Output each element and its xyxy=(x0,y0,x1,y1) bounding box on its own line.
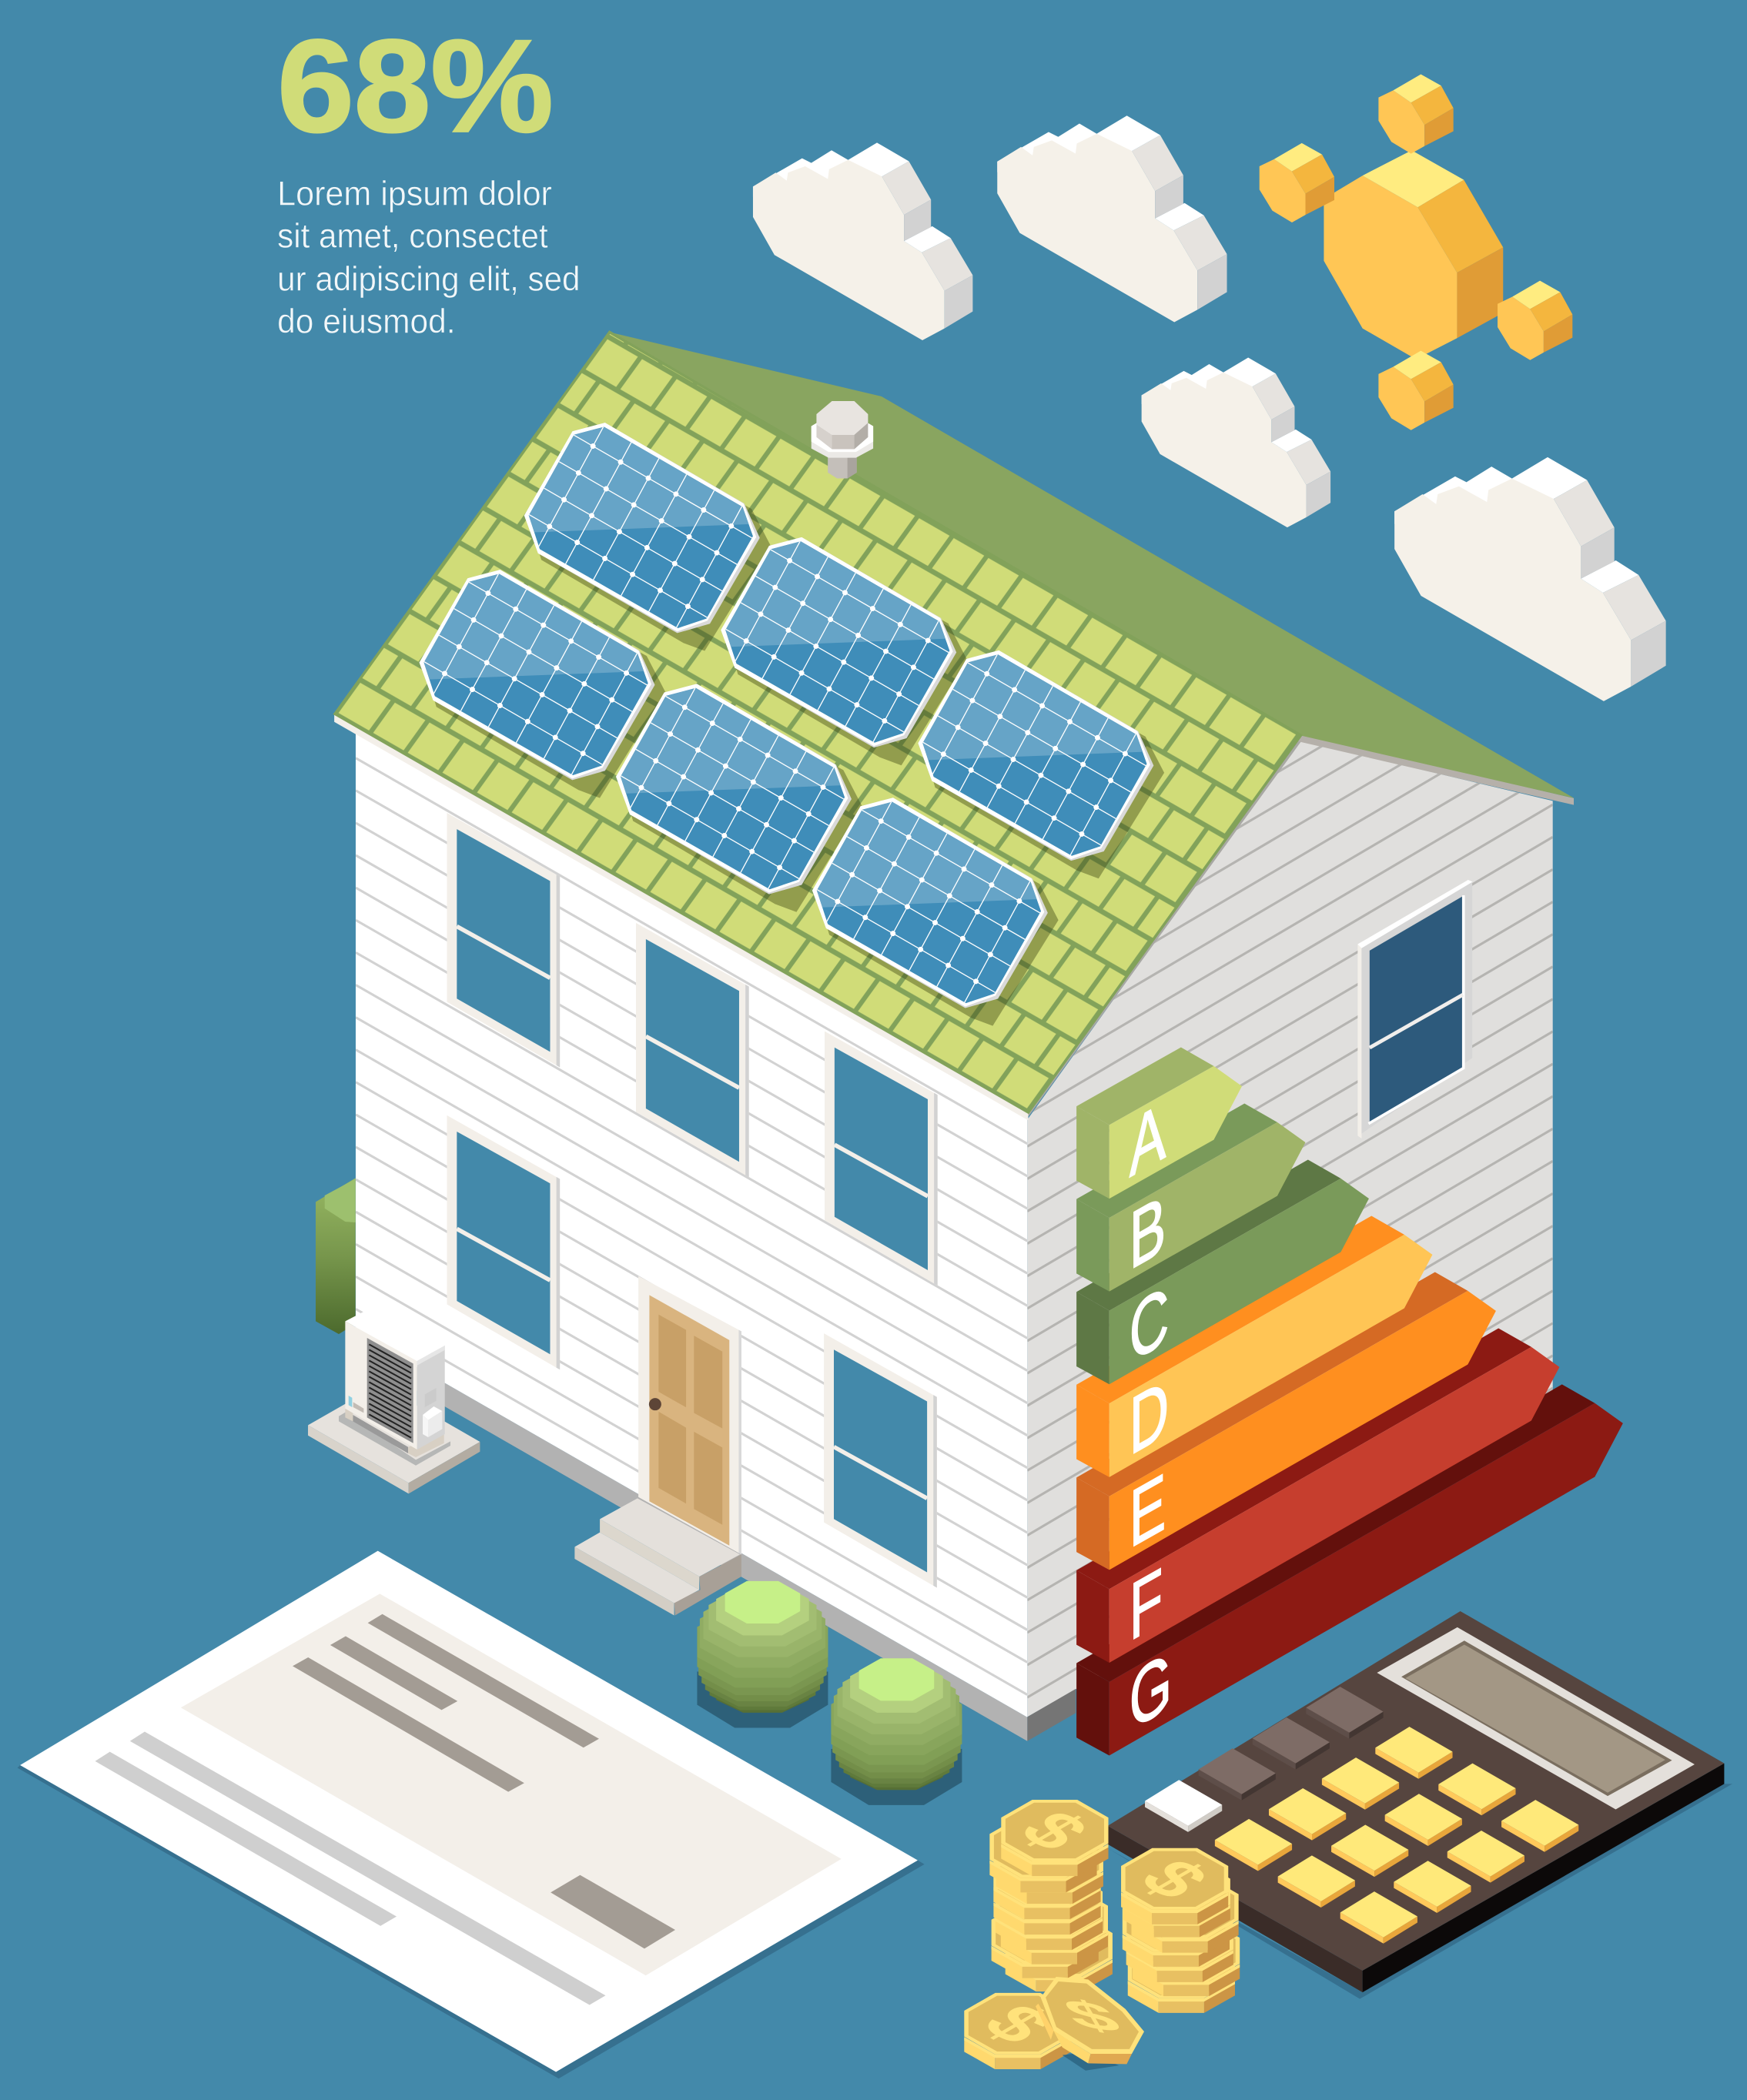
description text block: do eiusmod. xyxy=(277,303,456,341)
bar E: E xyxy=(1130,1455,1166,1566)
description text block: sit amet, consectet xyxy=(277,218,548,256)
coin stack left xyxy=(989,1800,1113,1991)
back roof plane and gable underside xyxy=(610,332,1575,805)
front wall with siding xyxy=(356,733,1027,1741)
bar C xyxy=(1076,1159,1369,1384)
coin stack left: $ xyxy=(1002,1801,1106,1861)
description text block: ur adipiscing elit, sed xyxy=(277,261,580,299)
solar panel 3 xyxy=(712,523,967,765)
loose coin flat: $ xyxy=(966,1994,1069,2054)
statistic heading: 68%: 68% xyxy=(277,14,554,159)
bar B: B xyxy=(1130,1176,1166,1287)
shrub 2 xyxy=(831,1658,962,1805)
back shrub behind house xyxy=(316,1178,356,1334)
front door xyxy=(638,1276,741,1554)
shrub 1 xyxy=(697,1581,828,1727)
window: upper right xyxy=(825,1032,938,1286)
bar G xyxy=(1076,1384,1623,1756)
window: lower right xyxy=(824,1333,937,1588)
calculator display xyxy=(1377,1627,1695,1809)
bar F: F xyxy=(1130,1550,1163,1658)
solar panel 4 xyxy=(607,670,862,912)
bar D: D xyxy=(1130,1360,1169,1473)
window: upper middle xyxy=(636,923,749,1177)
bar F xyxy=(1076,1328,1559,1663)
icon: cloud 1 xyxy=(753,142,972,340)
calculator number keys xyxy=(1215,1727,1578,1944)
roof vent xyxy=(812,401,873,478)
loose coin leaning xyxy=(1036,1977,1144,2071)
utility bill document xyxy=(18,1551,925,2078)
side window xyxy=(1357,880,1473,1139)
house xyxy=(308,332,1575,1741)
icon: sun xyxy=(1260,74,1572,430)
solar panel 1 xyxy=(516,409,771,651)
description text block: Lorem ipsum dolor xyxy=(277,176,552,213)
bar A xyxy=(1076,1048,1242,1199)
bar G: G xyxy=(1130,1634,1172,1747)
coin stack right xyxy=(1121,1848,1240,2013)
solar panel 5 xyxy=(909,636,1164,878)
loose coin leaning: $ xyxy=(1055,1990,1130,2042)
bar D xyxy=(1076,1216,1432,1477)
door steps xyxy=(574,1498,741,1616)
calculator function keys xyxy=(1145,1687,1384,1832)
description text block xyxy=(277,176,580,341)
solar panel 2 xyxy=(411,556,665,798)
window: upper left xyxy=(447,813,560,1067)
front roof with shingles xyxy=(334,332,1301,1120)
coin stack right: $ xyxy=(1123,1849,1227,1909)
icon: cloud 3 xyxy=(1142,357,1330,527)
icon: cloud 2 xyxy=(997,115,1227,322)
energy rating chart A to G xyxy=(1076,1048,1623,1756)
window: lower left xyxy=(447,1115,560,1369)
sky: clouds and sun xyxy=(753,74,1666,701)
bar E xyxy=(1076,1272,1496,1570)
side wall xyxy=(1027,741,1553,1741)
solar panel 6 xyxy=(804,784,1059,1026)
calculator xyxy=(1108,1611,1732,1999)
bar B xyxy=(1076,1104,1305,1292)
bar A: A xyxy=(1130,1084,1166,1195)
air conditioner on slab xyxy=(308,1303,480,1493)
bar C: C xyxy=(1130,1268,1169,1380)
icon: cloud 4 xyxy=(1394,457,1666,701)
